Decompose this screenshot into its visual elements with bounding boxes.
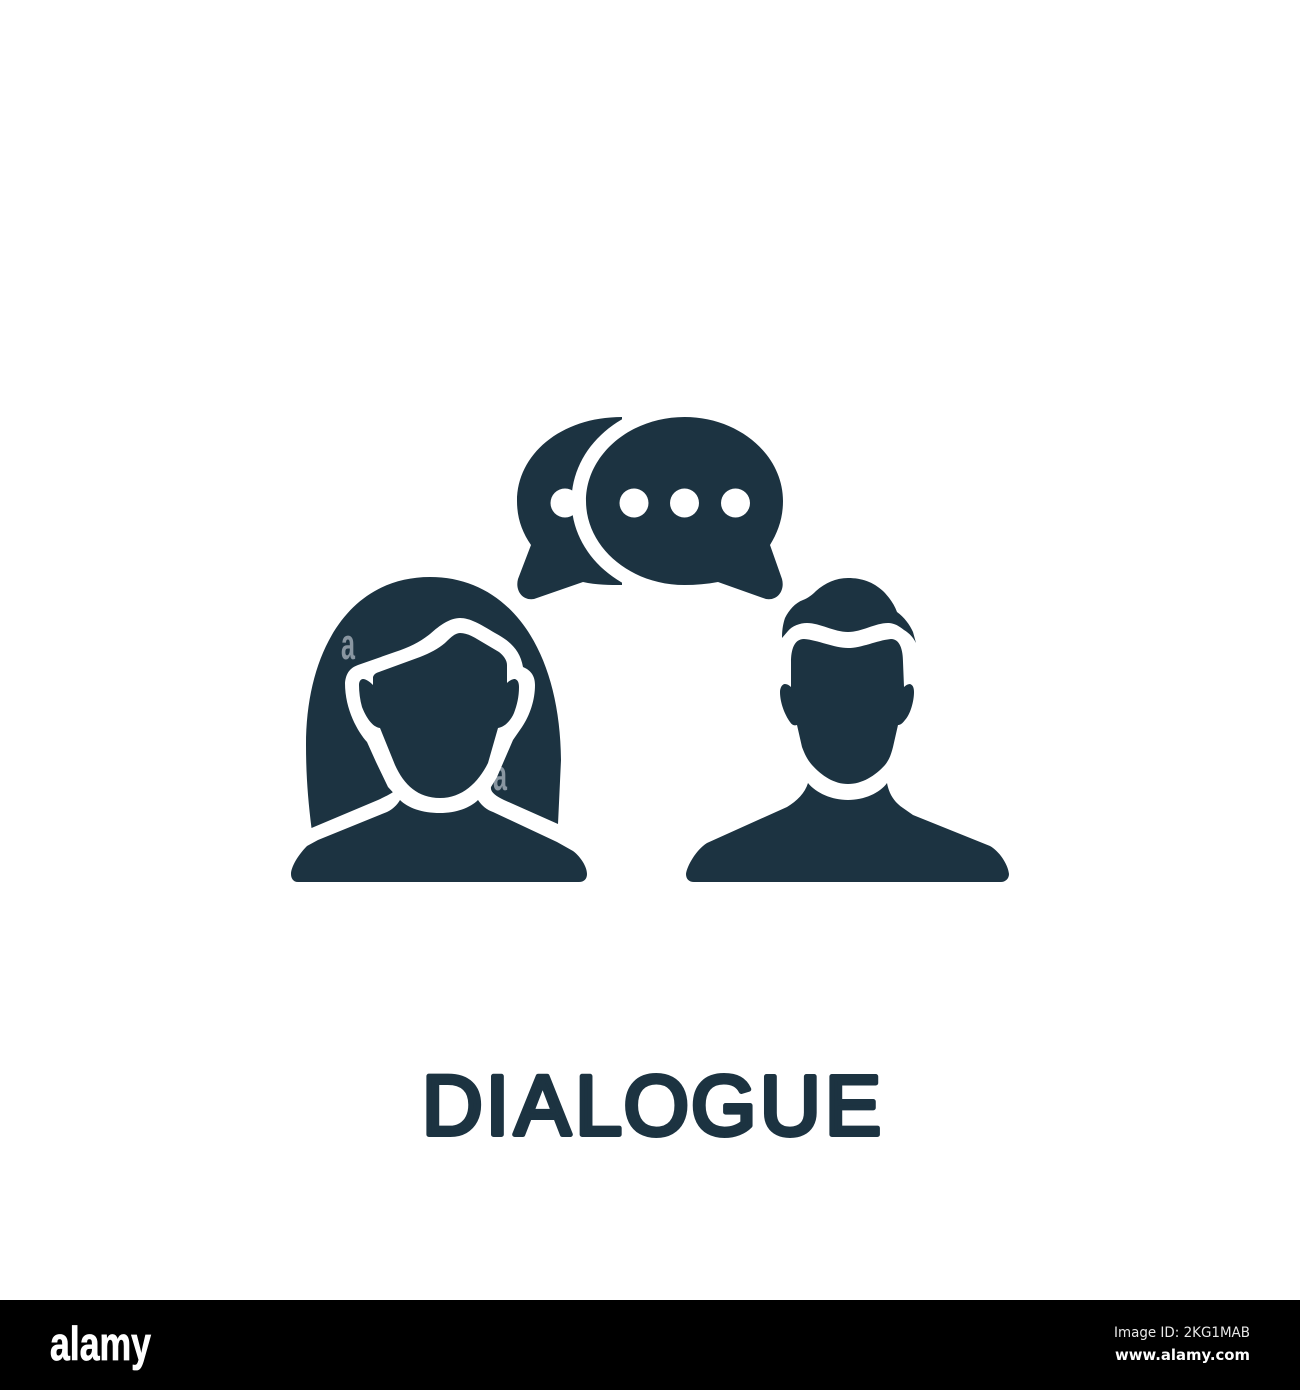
footer bar (0, 1300, 1300, 1390)
icon: man (686, 578, 1009, 882)
back bubble dot (550, 488, 580, 518)
gap ring redraw (572, 403, 684, 599)
image id: Image ID: 2KG1MAB (1114, 1325, 1250, 1341)
woman shoulders (291, 800, 587, 882)
man shoulders (686, 783, 1009, 882)
gap around front bubble (572, 403, 798, 599)
footer background (0, 1300, 1300, 1390)
woman face (359, 633, 519, 798)
icon: woman (291, 577, 587, 882)
watermark letter on hair: a (341, 620, 355, 669)
logo: alamy (50, 1317, 151, 1370)
dots (620, 488, 750, 518)
man head (780, 639, 914, 784)
watermark letter on neck: a (493, 751, 507, 800)
website: www.alamy.com (1115, 1346, 1250, 1364)
title: DIALOGUE (422, 1058, 881, 1152)
man hair (782, 578, 916, 643)
front speech bubble (586, 417, 783, 599)
face outline gap (345, 618, 535, 800)
icon: speech bubbles (517, 403, 798, 599)
back speech bubble (517, 417, 622, 599)
woman hair (306, 577, 561, 828)
